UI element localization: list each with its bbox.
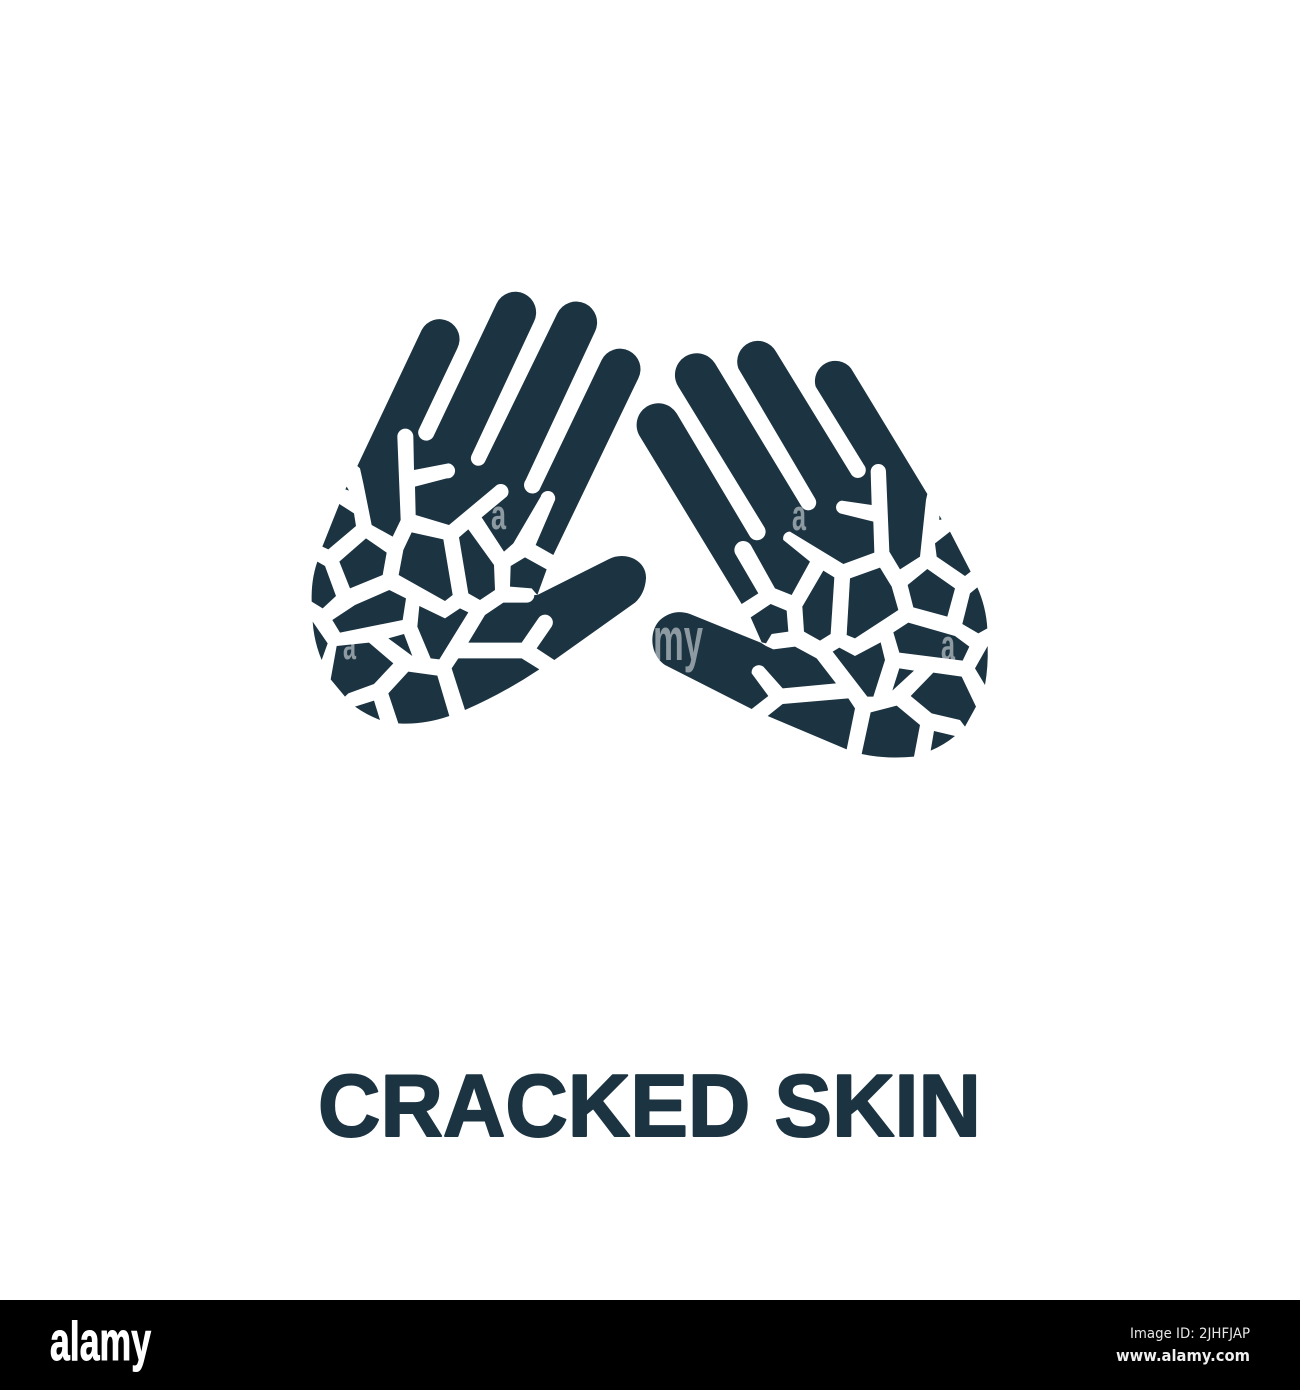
icon: left cracked hand bbox=[312, 292, 646, 724]
watermark fragments: a bbox=[491, 491, 506, 538]
icon: right cracked hand bbox=[637, 341, 988, 758]
left hand: skin fragments bbox=[312, 487, 547, 724]
watermark fragments: a bbox=[792, 491, 806, 540]
watermark fragments: a bbox=[941, 621, 955, 670]
title: CRACKED SKIN bbox=[318, 1056, 981, 1155]
right hand: thumb bbox=[652, 612, 836, 709]
left hand: thumb bbox=[468, 556, 646, 660]
website: www.alamy.com bbox=[1116, 1346, 1250, 1365]
right hand: fingers and upper palm bbox=[637, 341, 927, 604]
footer bar bbox=[0, 1300, 1300, 1390]
watermark fragments: my bbox=[653, 606, 703, 673]
right hand: skin fragments bbox=[751, 515, 988, 758]
left hand: fingers and upper palm bbox=[357, 292, 640, 555]
footer logo: alamy bbox=[50, 1310, 151, 1372]
watermark fragments bbox=[343, 491, 955, 673]
image id: Image ID: 2JHFJAP bbox=[1130, 1326, 1250, 1342]
watermark fragments: a bbox=[343, 624, 356, 668]
